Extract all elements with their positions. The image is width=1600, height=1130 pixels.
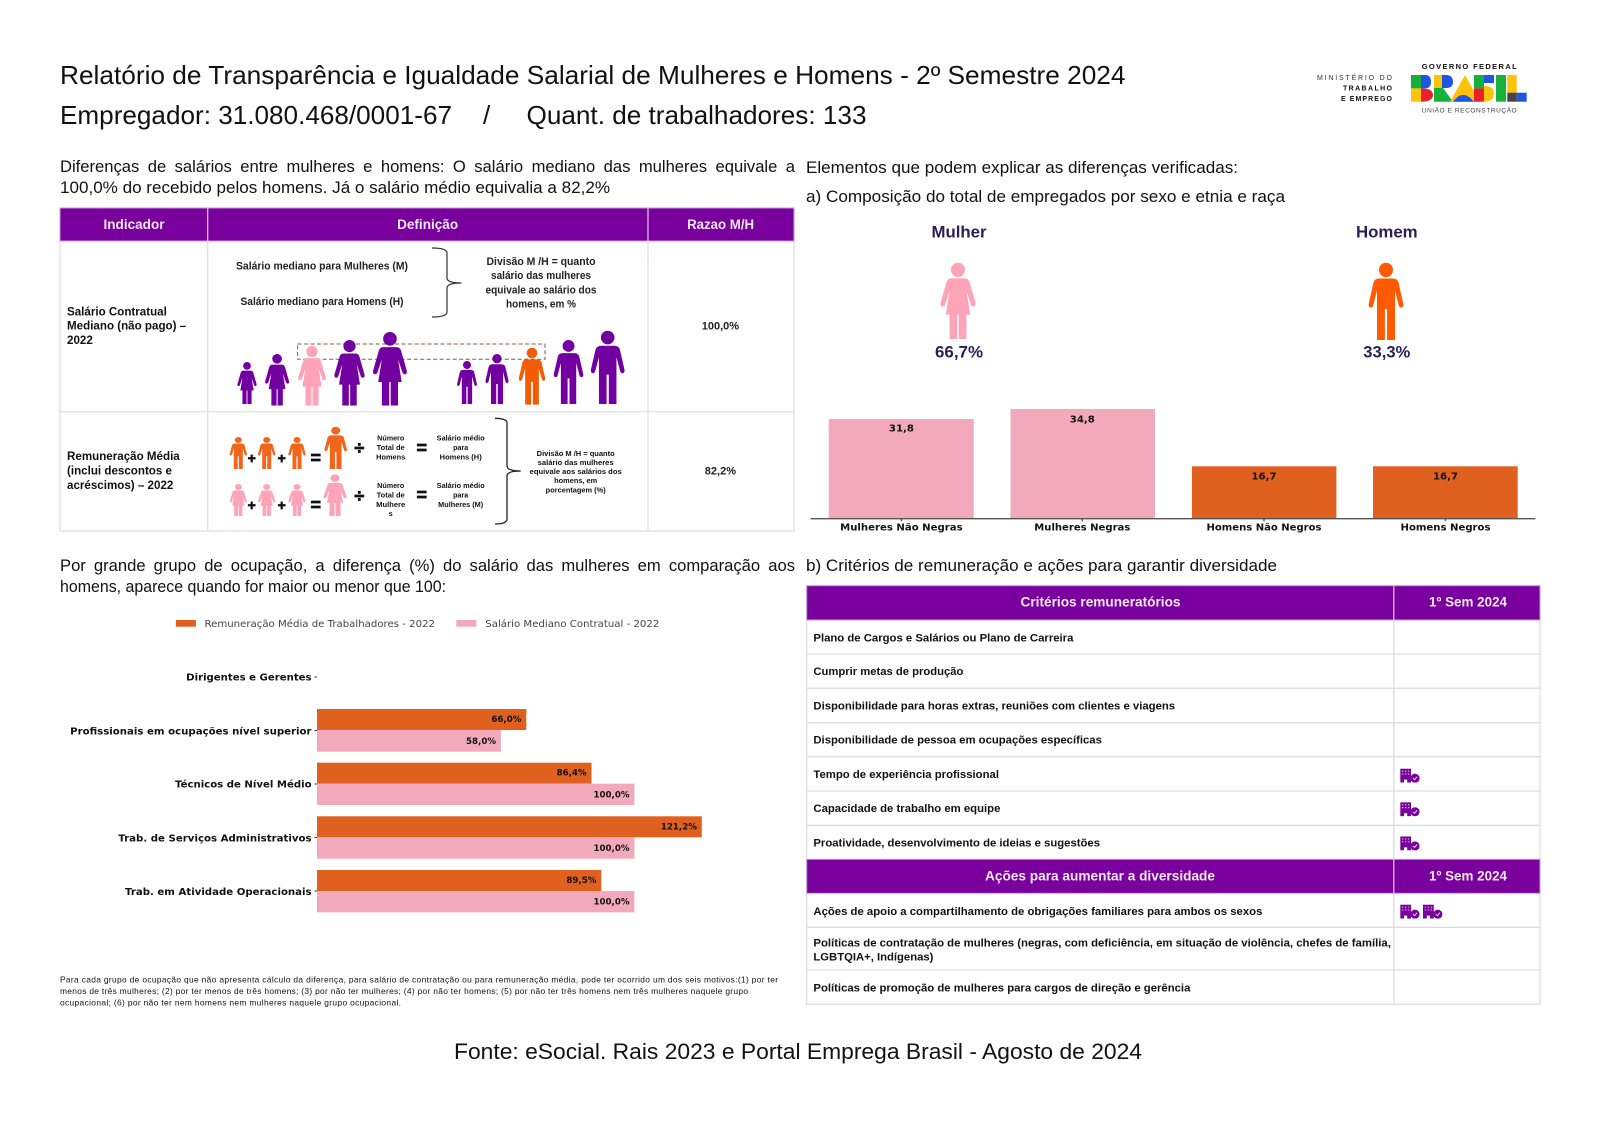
salário mediano formula: Salário mediano para Mulheres (M) (236, 260, 408, 272)
fórmula mulheres (230, 474, 485, 518)
title (60, 60, 1126, 130)
fórmula homens: = (310, 448, 321, 468)
panel: tabela critérios e ações (807, 586, 1540, 1004)
critérios: linhas: Disponibilidade de pessoa em ocupações específicas (813, 735, 1102, 747)
ações: linhas: LGBTQIA+, Indígenas) (813, 952, 934, 964)
text block: diferenças de salários (60, 156, 795, 197)
chave e divisão M/H: porcentagem (%) (546, 488, 606, 494)
bar chart: composição por sexo e raça: Mulheres Não Negras (840, 523, 963, 534)
salário mediano formula: salário das mulheres (491, 270, 591, 282)
bar chart: composição por sexo e raça: 16,7 (1433, 471, 1458, 482)
title: Quant. de trabalhadores: 133 (526, 100, 866, 130)
value: razão média: 82,2% (705, 466, 736, 478)
chart legend (176, 618, 659, 630)
table header: Definição (397, 217, 458, 232)
dashed median box (298, 344, 545, 359)
bar chart: composição por sexo e raça: Homens Negros (1400, 523, 1491, 534)
logo: ministério e governo federal (1317, 62, 1527, 114)
fórmula mulheres: Mulhere (376, 502, 405, 509)
bar chart: diferença por grupo de ocupação: 66,0% (491, 715, 521, 725)
bar chart: diferença por grupo de ocupação: Trab. em Atividade Operacionais (125, 887, 312, 898)
header: critérios remuneratórios: 1º Sem 2024 (1429, 594, 1507, 610)
logo: ministério e governo federal: UNIÃO E RECONSTRUÇÃO (1422, 106, 1517, 114)
title: / (483, 100, 491, 130)
fórmula mulheres: para (453, 492, 468, 500)
header: ações para aumentar a diversidade: 1º Sem 2024 (1429, 868, 1507, 884)
row label: salário contratual mediano: 2022 (67, 334, 93, 347)
chave e divisão M/H: equivale aos salários dos (530, 469, 622, 476)
salário mediano formula (236, 248, 596, 317)
text block: elementos explicativos: a) Composição do total de empregados por sexo e etnia e raça (806, 187, 1286, 206)
bar chart: composição por sexo e raça: Homens Não Negros (1206, 523, 1322, 534)
salário mediano formula: equivale ao salário dos (486, 284, 596, 296)
text block: por grande grupo de ocupação (60, 554, 795, 596)
row label: salário contratual mediano: Mediano (não pago) – (67, 320, 187, 332)
bar chart: diferença por grupo de ocupação: 100,0% (594, 790, 630, 800)
row label: remuneração média (67, 450, 180, 492)
chart legend: Remuneração Média de Trabalhadores - 2022 (204, 618, 435, 630)
critérios: linhas: Tempo de experiência profissional (813, 769, 999, 781)
fórmula homens: ÷ (354, 438, 364, 458)
text block: elementos explicativos (806, 158, 1286, 206)
bar chart: diferença por grupo de ocupação (70, 673, 702, 912)
fórmula homens: Homens (376, 454, 405, 462)
row label: salário contratual mediano: Salário Contratual (67, 306, 167, 318)
heading: critérios de remuneração: b) Critérios de remuneração e ações para garantir diversidade (806, 556, 1277, 575)
text block: diferenças de salários: Diferenças de salários entre mulheres e homens: O salário mediano das mulheres equivale a (60, 156, 795, 176)
text block: diferenças de salários: 100,0% do recebido pelos homens. Já o salário médio equivalia a 82,2% (60, 178, 610, 197)
row label: remuneração média: Remuneração Média (67, 450, 180, 463)
icons: duas empresas com check (1400, 905, 1442, 919)
row label: remuneração média: (inclui descontos e (67, 464, 173, 478)
bar chart: diferença por grupo de ocupação: 100,0% (594, 897, 630, 907)
bar chart: composição por sexo e raça (810, 409, 1535, 534)
bar chart: diferença por grupo de ocupação: 121,2% (661, 822, 697, 832)
bar chart: diferença por grupo de ocupação: 86,4% (557, 769, 587, 779)
ações: linhas (813, 906, 1391, 994)
text block: por grande grupo de ocupação: homens, aparece quando for maior ou menor que 100: (60, 577, 446, 596)
header: ações para aumentar a diversidade: Ações para aumentar a diversidade (985, 868, 1215, 884)
chave e divisão M/H: salário das mulheres (538, 460, 614, 467)
critérios: linhas: Capacidade de trabalho em equipe (813, 803, 1000, 815)
fórmula homens: Número (377, 436, 404, 442)
fórmula mulheres: Número (377, 483, 404, 490)
table header (60, 208, 794, 241)
fórmula mulheres: = (310, 495, 321, 515)
fórmula homens: Salário médio (437, 436, 485, 442)
fórmula mulheres: + (278, 497, 286, 513)
fórmula homens: + (278, 450, 286, 466)
ações: linhas: Ações de apoio a compartilhamento de obrigações familiares para ambos os sexos (813, 906, 1262, 918)
fórmula mulheres: Total de (377, 492, 405, 500)
bar chart: diferença por grupo de ocupação: 58,0% (466, 737, 496, 747)
footnote: Para cada grupo de ocupação que não apresenta cálculo da diferença, para salário de contratação ou para remuneração média, pode ter ocorrido um dos seis motivos:(1) por ter (60, 974, 778, 984)
salário mediano formula: homens, em % (506, 298, 576, 310)
bar chart: composição por sexo e raça: Mulheres Negras (1034, 523, 1131, 534)
bar chart: diferença por grupo de ocupação: Técnicos de Nível Médio (175, 779, 312, 791)
fórmula homens: Total de (377, 445, 405, 452)
bar chart: diferença por grupo de ocupação: 100,0% (594, 844, 630, 854)
title: Relatório de Transparência e Igualdade Salarial de Mulheres e Homens - 2º Semestre 2024 (60, 60, 1126, 90)
icon: mulher 66,7%: 66,7% (935, 343, 983, 362)
critérios: linhas: Plano de Cargos e Salários ou Plano de Carreira (813, 632, 1074, 644)
salário mediano formula: Divisão M /H = quanto (486, 256, 596, 268)
critérios: linhas: Proatividade, desenvolvimento de ideias e sugestões (813, 837, 1100, 849)
fórmula homens: + (248, 450, 256, 466)
logo: ministério e governo federal: E EMPREGO (1341, 96, 1393, 103)
icon: mulher 66,7% (932, 223, 987, 362)
critérios: linhas: Cumprir metas de produção (813, 666, 963, 678)
salário mediano formula: Salário mediano para Homens (H) (240, 296, 404, 308)
fórmula mulheres: s (389, 511, 393, 518)
bar chart: diferença por grupo de ocupação: Trab. de Serviços Administrativos (118, 833, 312, 844)
bar chart: composição por sexo e raça: 31,8 (889, 424, 914, 435)
header: critérios remuneratórios: Critérios remuneratórios (1020, 594, 1180, 610)
title: Empregador: 31.080.468/0001-67 (60, 100, 452, 130)
fonte: Fonte: eSocial. Rais 2023 e Portal Emprega Brasil - Agosto de 2024 (454, 1039, 1142, 1064)
fórmula mulheres: ÷ (354, 486, 364, 506)
fórmula mulheres: + (248, 497, 256, 513)
icon: homem 33,3% (1356, 223, 1418, 362)
table header: Razao M/H (687, 217, 754, 232)
fórmula homens: Homens (H) (440, 454, 482, 462)
icon: mulher 66,7%: Mulher (932, 223, 987, 242)
fórmula homens: para (453, 445, 468, 452)
panel: tabela indicador definição razão (60, 208, 794, 531)
logo: ministério e governo federal: MINISTÉRIO DO (1317, 73, 1393, 82)
fórmula homens (230, 427, 485, 469)
fórmula mulheres: = (416, 485, 427, 505)
table header: Indicador (104, 217, 165, 232)
text block: por grande grupo de ocupação: Por grande grupo de ocupação, a diferença (%) do salário das mulheres em comparação aos (60, 556, 795, 574)
fórmula mulheres: Mulheres (M) (438, 502, 483, 509)
bar chart: diferença por grupo de ocupação: 89,5% (566, 876, 596, 886)
value: razão mediana: 100,0% (702, 320, 739, 332)
icon: homem 33,3%: 33,3% (1363, 343, 1410, 362)
header: ações para aumentar a diversidade (807, 859, 1540, 893)
footnote: ocupacional; (6) por não ter nem homens nem mulheres naquele grupo ocupacional. (60, 998, 401, 1008)
chart legend: Salário Mediano Contratual - 2022 (485, 618, 659, 630)
bar chart: diferença por grupo de ocupação: Dirigentes e Gerentes (186, 673, 312, 684)
icons: mulheres e homens em fila (237, 331, 625, 406)
fórmula mulheres: Salário médio (437, 483, 485, 490)
chave e divisão M/H (495, 418, 622, 524)
row label: remuneração média: acréscimos) – 2022 (67, 479, 173, 492)
fórmula homens: = (416, 438, 427, 458)
bar chart: diferença por grupo de ocupação: Profissionais em ocupações nível superior (70, 725, 312, 737)
logo: ministério e governo federal: GOVERNO FEDERAL (1422, 62, 1517, 71)
ações: linhas: Políticas de contratação de mulheres (negras, com deficiência, em situação de violência, chefes de família, (813, 937, 1391, 949)
icons: empresa com check (1400, 769, 1420, 851)
chave e divisão M/H: Divisão M /H = quanto (537, 451, 615, 458)
footnote: menos de três mulheres; (2) por ter menos de três homens; (3) por não ter mulheres; (4) por não ter homens; (5) por não ter três homens nem três mulheres naquele grupo (60, 986, 748, 996)
row label: salário contratual mediano (67, 306, 187, 347)
bar chart: composição por sexo e raça: 16,7 (1252, 471, 1276, 482)
critérios: linhas: Disponibilidade para horas extras, reuniões com clientes e viagens (813, 701, 1175, 713)
critérios: linhas (813, 632, 1175, 849)
ações: linhas: Políticas de promoção de mulheres para cargos de direção e gerência (813, 982, 1191, 994)
footnote (60, 974, 778, 1008)
chave e divisão M/H: homens, em (554, 478, 597, 485)
header: critérios remuneratórios (807, 586, 1540, 620)
bar chart: composição por sexo e raça: 34,8 (1070, 414, 1095, 425)
logo: ministério e governo federal: TRABALHO (1343, 85, 1393, 92)
text block: elementos explicativos: Elementos que podem explicar as diferenças verificadas: (806, 158, 1238, 177)
icon: homem 33,3%: Homem (1356, 223, 1418, 242)
